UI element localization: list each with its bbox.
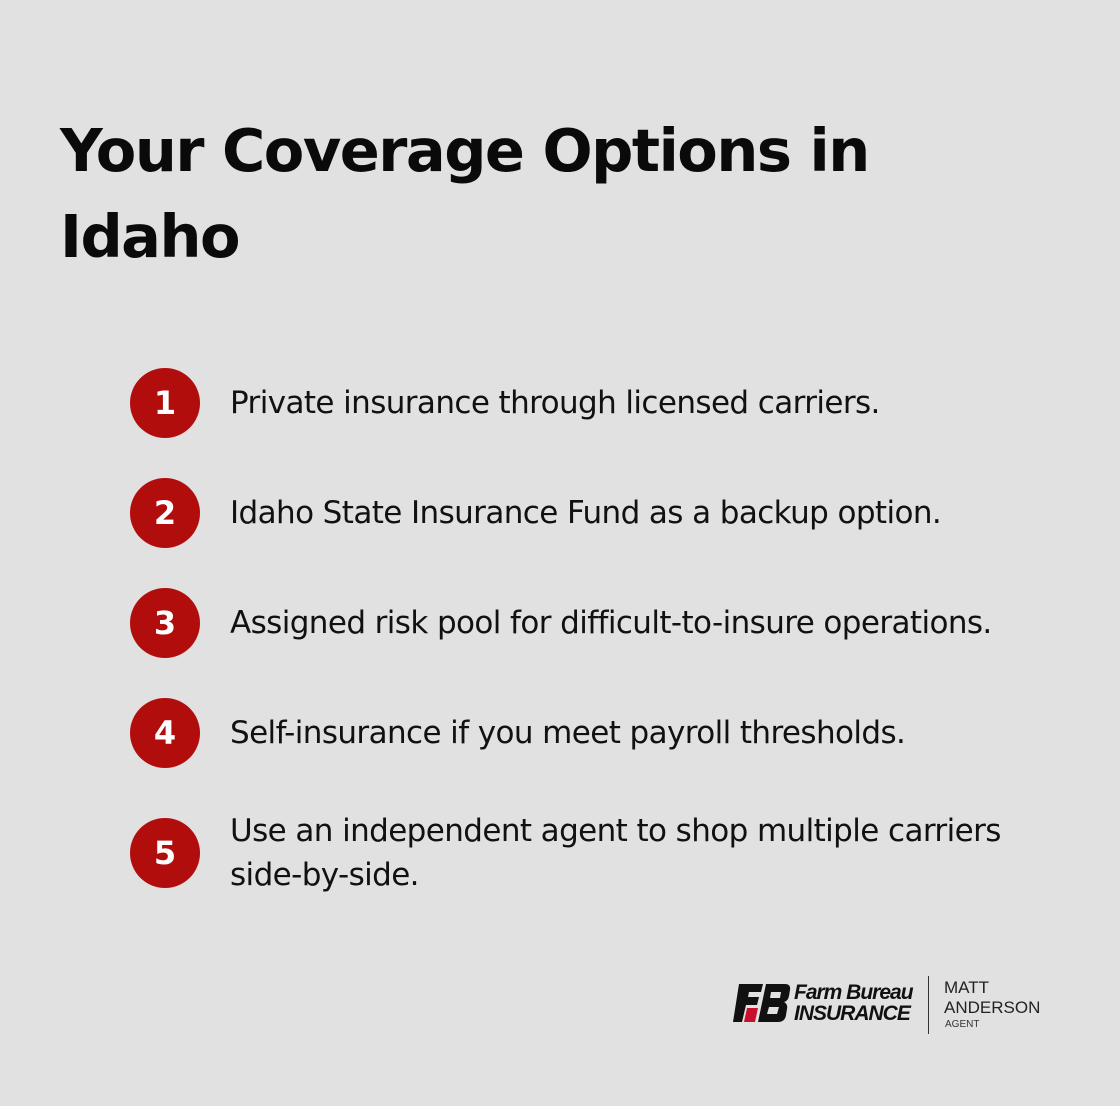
logo: ANDERSON — [944, 998, 1040, 1017]
item 1: Private insurance through licensed carriers. — [230, 385, 880, 421]
logo: Farm Bureau — [794, 981, 913, 1004]
logo: AGENT — [945, 1019, 979, 1030]
logo: INSURANCE — [794, 1002, 910, 1025]
item 3: 3 — [154, 604, 176, 642]
item 4 — [130, 698, 905, 768]
item 5: side-by-side. — [230, 857, 419, 893]
logo — [733, 976, 1040, 1034]
item 1: 1 — [154, 384, 176, 422]
item 2 — [130, 478, 941, 548]
icon: FB mark — [733, 984, 790, 1022]
item 5: Use an independent agent to shop multiple carriers — [230, 813, 1001, 849]
title: Your Coverage Options in — [60, 116, 869, 185]
item 4: Self-insurance if you meet payroll thresholds. — [230, 715, 905, 751]
title — [60, 116, 869, 271]
item 2: Idaho State Insurance Fund as a backup option. — [230, 495, 941, 531]
item 5 — [130, 813, 1001, 893]
logo: MATT — [944, 978, 989, 997]
item 3: Assigned risk pool for difficult-to-insure operations. — [230, 605, 992, 641]
item 2: 2 — [154, 494, 176, 532]
item 4: 4 — [154, 714, 176, 752]
item 5: 5 — [154, 834, 176, 872]
item 3 — [130, 588, 992, 658]
item 1 — [130, 368, 880, 438]
title: Idaho — [60, 202, 239, 271]
